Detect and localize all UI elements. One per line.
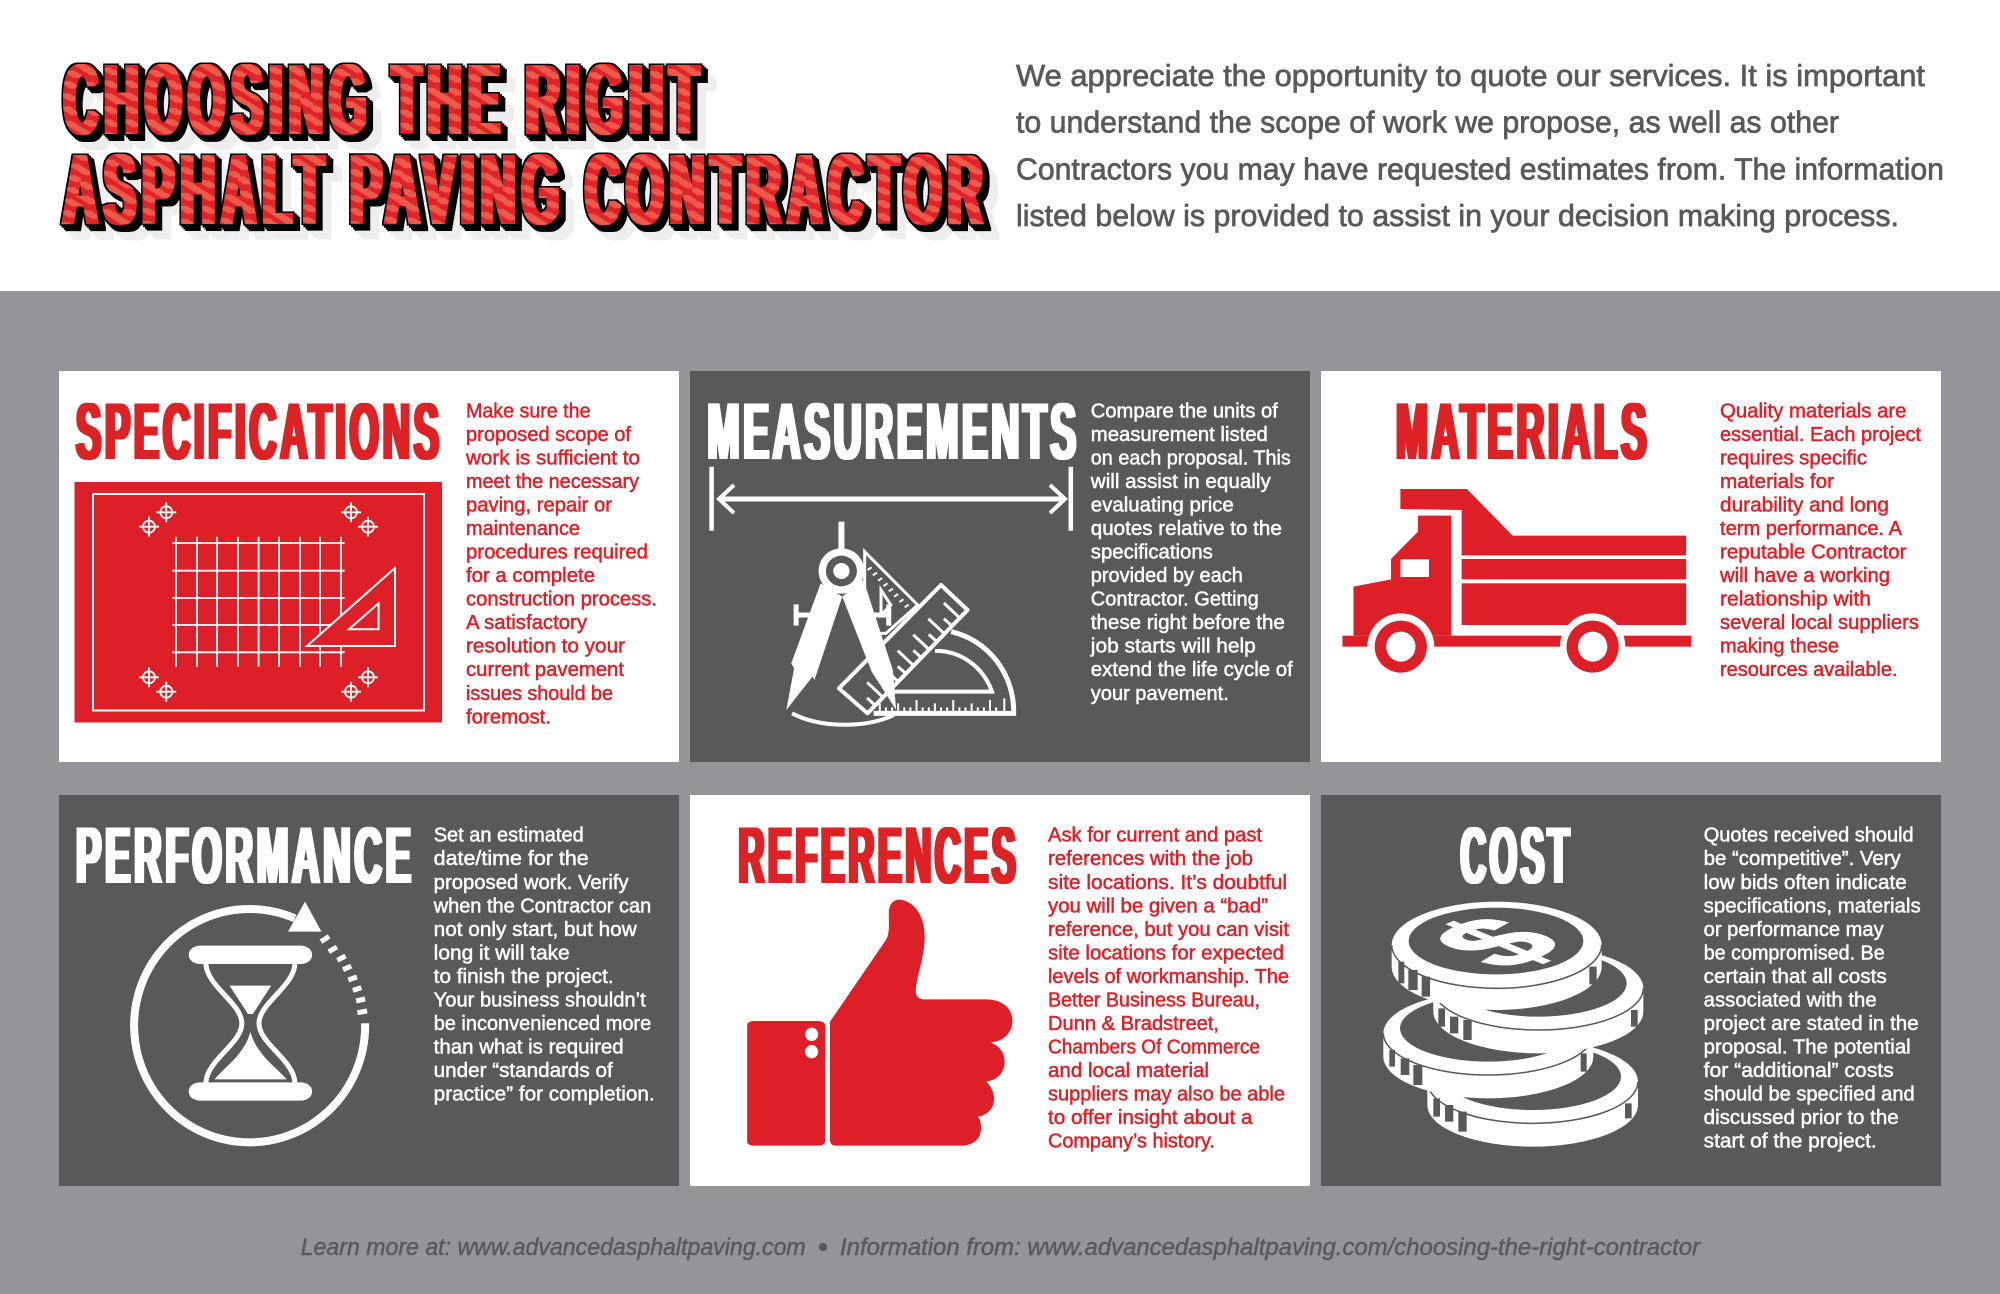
text: references: Ask for current and past [1048, 825, 1262, 847]
text: references [1048, 825, 1289, 1153]
text: performance: be inconvenienced more [434, 1013, 651, 1035]
text: performance: Set an estimated [434, 825, 584, 847]
text: materials: materials for [1720, 471, 1834, 493]
intro text [1016, 58, 1944, 233]
text: specifications: issues should be [466, 683, 613, 705]
title [63, 44, 989, 246]
text: cost: associated with the [1704, 990, 1877, 1012]
text: specifications [465, 400, 657, 728]
text: ASPHALT PAVING CONTRACTOR [63, 134, 989, 246]
text: references: reference, but you can visit [1048, 919, 1289, 941]
text: materials: reputable Contractor [1720, 542, 1907, 564]
panel: references: REFERENCES [738, 811, 1019, 901]
icon: thumbs up [747, 900, 1012, 1146]
text: performance: when the Contractor can [433, 895, 651, 917]
text: cost: proposal. The potential [1704, 1037, 1911, 1059]
text: references: Dunn & Bradstreet, [1048, 1013, 1219, 1035]
text: cost: start of the project. [1704, 1131, 1877, 1153]
panel: materials [1321, 371, 1941, 762]
panel: cost: COST [1460, 811, 1573, 901]
gray background band [0, 291, 2000, 1294]
icon: blueprint [74, 482, 442, 722]
text: specifications: Make sure the [466, 400, 590, 422]
panel: references [690, 795, 1310, 1186]
text: specifications: A satisfactory [466, 612, 587, 634]
text: references: to offer insight about a [1048, 1107, 1253, 1129]
intro text: listed below is provided to assist in your decision making process. [1016, 198, 1899, 233]
text: ASPHALT PAVING CONTRACTOR [63, 134, 989, 246]
intro text: to understand the scope of work we propose, as well as other [1016, 105, 1839, 140]
text: materials: resources available. [1720, 659, 1898, 681]
panel: cost [1321, 795, 1941, 1186]
text: measurements: evaluating price [1091, 494, 1234, 516]
panel: specifications: SPECIFICATIONS [76, 387, 443, 477]
text: specifications: procedures required [466, 542, 648, 564]
text: specifications: paving, repair or [466, 494, 612, 516]
text: performance: not only start, but how [434, 919, 637, 941]
footer: Information from: www.advancedasphaltpaving.com/choosing-the-right-contractor [840, 1234, 1701, 1261]
text: materials [1719, 400, 1921, 681]
panel: performance: PERFORMANCE [76, 811, 415, 901]
text: specifications: current pavement [466, 659, 624, 681]
text: materials: requires specific [1720, 447, 1867, 469]
text: references: suppliers may also be able [1048, 1084, 1285, 1106]
text: materials: will have a working [1719, 565, 1890, 587]
text: specifications: work is sufficient to [465, 447, 640, 469]
text: materials: relationship with [1720, 589, 1871, 611]
icon: drafting tools [786, 522, 1014, 725]
text: measurements: your pavement. [1091, 683, 1229, 705]
panel: measurements: MEASUREMENTS [708, 387, 1080, 477]
panel: measurements [690, 371, 1310, 762]
text: specifications: foremost. [466, 706, 551, 728]
text: cost: certain that all costs [1704, 966, 1887, 988]
text: measurements: these right before the [1091, 612, 1285, 634]
text: measurements: quotes relative to the [1091, 518, 1282, 540]
text: cost: or performance may [1704, 919, 1884, 941]
text: specifications: construction process. [466, 589, 657, 611]
text: specifications: meet the necessary [466, 471, 639, 493]
text: measurements: will assist in equally [1090, 471, 1271, 493]
text: cost: for “additional” costs [1704, 1060, 1894, 1082]
text: references: references with the job [1048, 848, 1253, 870]
text: references: levels of workmanship. The [1048, 966, 1289, 988]
text: specifications: resolution to your [466, 636, 625, 658]
icon: coin stack [1383, 902, 1643, 1147]
footer: Learn more at: www.advancedasphaltpaving.com [301, 1234, 806, 1261]
text: specifications: for a complete [466, 565, 595, 587]
text: cost: be “competitive”. Very [1704, 848, 1901, 870]
text: references: and local material [1048, 1060, 1209, 1082]
text: performance: to finish the project. [434, 966, 614, 988]
text: references: you will be given a “bad” [1048, 895, 1268, 917]
text: measurements: measurement listed [1091, 424, 1268, 446]
panel: performance [59, 795, 679, 1186]
text: materials: term performance. A [1720, 518, 1903, 540]
title: CHOOSING THE RIGHT [64, 44, 705, 156]
text: performance: Your business shouldn’t [434, 990, 646, 1012]
text: references: Better Business Bureau, [1048, 990, 1260, 1012]
text: materials: making these [1720, 636, 1839, 658]
text: performance: than what is required [434, 1037, 624, 1059]
text: cost: project are stated in the [1704, 1013, 1919, 1035]
text: materials: essential. Each project [1720, 424, 1921, 446]
text: measurements: Compare the units of [1091, 400, 1278, 422]
arrow: width dimension [712, 467, 1071, 531]
icon: dump truck [1342, 489, 1691, 680]
text: measurements: provided by each [1091, 565, 1243, 587]
title: CHOOSING THE RIGHT [64, 44, 705, 156]
text: performance: practice” for completion. [434, 1084, 655, 1106]
text: materials: Quality materials are [1720, 400, 1906, 422]
text: performance: proposed work. Verify [434, 872, 629, 894]
text: performance: date/time for the [434, 848, 589, 870]
text: performance: under “standards of [434, 1060, 613, 1082]
text: performance: long it will take [434, 942, 570, 964]
text: references: site locations for expected [1048, 942, 1284, 964]
text: measurements [1090, 400, 1293, 705]
text: performance [433, 825, 655, 1106]
text: cost: Quotes received should [1704, 825, 1914, 847]
icon: coin stack: $ [1399, 902, 1594, 982]
text: specifications: proposed scope of [466, 424, 631, 446]
text: measurements: on each proposal. This [1091, 447, 1291, 469]
text: measurements: specifications [1091, 542, 1213, 564]
intro text: Contractors you may have requested estimates from. The information [1016, 151, 1944, 186]
text: materials: durability and long [1720, 494, 1889, 516]
panel: materials: MATERIALS [1396, 387, 1650, 477]
panel: specifications [59, 371, 679, 762]
text: cost: should be specified and [1704, 1084, 1915, 1106]
text: cost: specifications, materials [1704, 895, 1921, 917]
text: measurements: extend the life cycle of [1091, 659, 1293, 681]
text: references: site locations. It’s doubtful [1048, 872, 1287, 894]
text: measurements: Contractor. Getting [1091, 589, 1259, 611]
text: cost: discussed prior to the [1704, 1107, 1899, 1129]
text: cost: be compromised. Be [1704, 942, 1885, 964]
text: materials: several local suppliers [1720, 612, 1919, 634]
footer [301, 1231, 1701, 1264]
icon: hourglass with progress ring [134, 902, 367, 1142]
text: cost [1704, 825, 1921, 1153]
text: cost: low bids often indicate [1704, 872, 1907, 894]
text: references: Chambers Of Commerce [1048, 1037, 1260, 1059]
intro text: We appreciate the opportunity to quote our services. It is important [1016, 58, 1925, 93]
footer: • [818, 1231, 828, 1264]
text: measurements: job starts will help [1090, 636, 1256, 658]
text: references: Company’s history. [1048, 1131, 1215, 1153]
text: specifications: maintenance [466, 518, 580, 540]
